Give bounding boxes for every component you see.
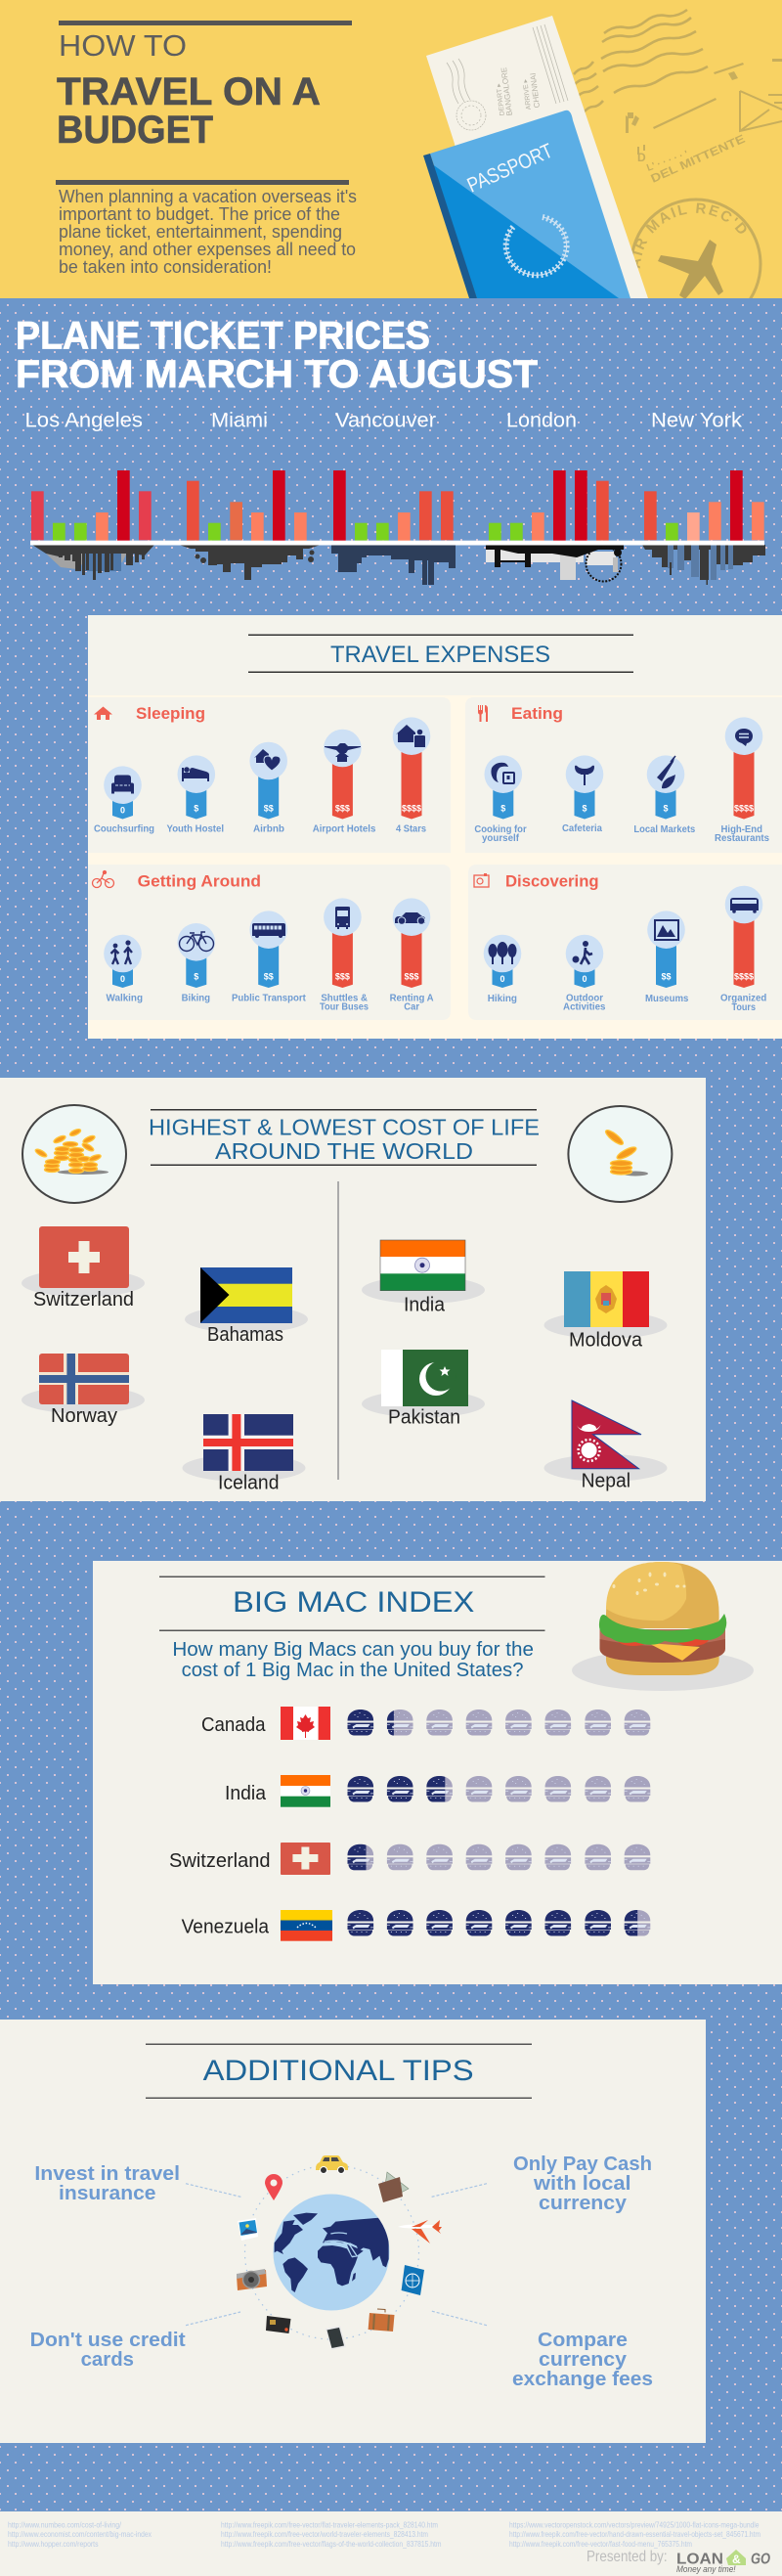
sources column 1: http://www.hopper.com/reports — [8, 2539, 98, 2549]
tip: compare exchange fees — [512, 2330, 653, 2390]
heading: travel expenses: TRAVEL EXPENSES — [330, 642, 550, 668]
air mail stamp — [631, 198, 762, 298]
item: cooking for yourself — [474, 755, 527, 844]
row: canada — [201, 1707, 650, 1740]
item: cafeteria: Cafeteria — [562, 823, 602, 834]
icon: camera — [474, 873, 489, 887]
item: cooking for yourself: Cooking for — [474, 824, 527, 835]
item: cooking for yourself: yourself — [482, 833, 520, 844]
item: renting a car: $$$ — [404, 972, 419, 982]
card: eating — [465, 697, 782, 853]
item: local markets — [633, 755, 696, 835]
intro paragraph: When planning a vacation overseas it's — [59, 187, 357, 206]
item: biking: Biking — [182, 993, 210, 1003]
item: organized tours: Organized — [720, 993, 766, 1003]
item: walking: Walking — [106, 993, 143, 1003]
title: travel on a budget: TRAVEL ON A — [57, 70, 321, 113]
sources column 3 — [509, 2519, 760, 2549]
item: youth hostel: $ — [194, 804, 198, 814]
skyline: Los Angeles — [32, 545, 154, 580]
city labels: Miami — [211, 409, 268, 432]
heading: cost of life: AROUND THE WORLD — [215, 1138, 473, 1164]
bars: Los Angeles — [31, 470, 152, 541]
item: high-end restaurants: High-End — [721, 824, 762, 835]
item: outdoor activities: 0 — [582, 974, 587, 984]
row: switzerland: Switzerland — [169, 1850, 270, 1872]
section title: FROM MARCH TO AUGUST — [16, 353, 538, 396]
row: venezuela — [182, 1910, 650, 1941]
sources column 1: http://www.economist.com/content/big-mac-index — [8, 2529, 152, 2539]
icon: smartphone — [326, 2326, 346, 2350]
item: organized tours: Tours — [731, 1002, 756, 1013]
panel: highest and lowest cost of life — [0, 1078, 706, 1501]
bars: Miami — [187, 470, 307, 541]
del mittente stamp: L' · · · · · ' — [645, 149, 690, 174]
intro paragraph: important to budget. The price of the — [59, 204, 340, 224]
icon: cyclist — [92, 870, 113, 888]
item: public transport: Public Transport — [232, 993, 306, 1003]
item: 4 stars — [393, 717, 430, 835]
sources column 2: http://www.freepik.com/free-vector/flags-of-the-world-collection_837815.htm — [221, 2539, 442, 2549]
boarding ticket: BANGALORE — [500, 67, 514, 116]
flag: nepal — [543, 1400, 667, 1492]
tip: only pay cash: currency — [539, 2193, 628, 2214]
sources column 2: http://www.freepik.com/free-vector/flat-traveler-elements-pack_828140.htm — [221, 2519, 438, 2529]
item: cooking for yourself: $ — [500, 804, 505, 814]
flag: switzerland — [22, 1226, 145, 1310]
item: couchsurfing — [94, 766, 154, 835]
item: walking: 0 — [120, 974, 125, 984]
postmark wavy lines — [574, 10, 708, 112]
flag: nepal: Nepal — [582, 1471, 630, 1492]
heading: additional tips: ADDITIONAL TIPS — [203, 2055, 474, 2087]
section: plane ticket prices — [16, 315, 765, 585]
icon: passport — [402, 2265, 424, 2295]
item: renting a car — [390, 898, 434, 1012]
del mittente stamp: DEL MITTENTE — [649, 132, 747, 186]
intro paragraph: be taken into consideration! — [59, 257, 272, 277]
flag: india — [362, 1240, 485, 1316]
intro paragraph — [59, 187, 357, 277]
boarding ticket: ARRIVE ▸ — [522, 78, 533, 111]
item: biking: $ — [194, 972, 198, 982]
flag: iceland — [182, 1414, 305, 1494]
item: public transport: $$ — [264, 972, 274, 982]
flag: moldova: Moldova — [569, 1330, 643, 1352]
icon: camera — [237, 2269, 267, 2290]
card: discovering — [468, 865, 782, 1020]
illustration: burger — [572, 1562, 754, 1691]
sources column 1 — [8, 2519, 152, 2549]
item: biking — [178, 923, 215, 1003]
title rule top — [59, 21, 352, 25]
tip: do not use credit cards — [30, 2330, 186, 2371]
flag: iceland: Iceland — [218, 1473, 280, 1494]
item: local markets: Local Markets — [633, 824, 696, 835]
row: switzerland — [169, 1843, 650, 1875]
flag: norway: Norway — [51, 1405, 117, 1427]
bars: London — [489, 470, 609, 541]
icon: wallet with cash — [378, 2172, 409, 2202]
row: india: India — [225, 1783, 267, 1804]
logo: loan and go: Money any time! — [676, 2564, 736, 2574]
intro paragraph: plane ticket, entertainment, spending — [59, 222, 342, 242]
item: high-end restaurants: $$$$ — [734, 804, 754, 814]
item: outdoor activities: Activities — [563, 1001, 606, 1012]
logo: loan and go: LOAN — [676, 2552, 723, 2568]
tip: do not use credit cards: Don't use credit — [30, 2330, 186, 2351]
item: organized tours — [720, 886, 766, 1013]
item: public transport — [232, 910, 306, 1003]
item: museums: $$ — [661, 972, 672, 982]
connector lines — [186, 2165, 487, 2339]
tip: only pay cash: Only Pay Cash — [513, 2154, 652, 2175]
item: walking — [104, 935, 143, 1003]
item: renting a car: Car — [404, 1001, 419, 1012]
item: museums — [645, 910, 689, 1004]
item: couchsurfing: 0 — [120, 806, 125, 816]
heading: cost of life — [149, 1109, 540, 1166]
city labels: New York — [651, 409, 743, 432]
heading: eating: Eating — [511, 704, 563, 723]
city labels — [25, 409, 743, 432]
item: airport hotels — [313, 730, 376, 835]
icon: credit card — [266, 2316, 291, 2333]
flag: norway — [22, 1354, 145, 1427]
tip: compare exchange fees: Compare — [538, 2330, 628, 2351]
tip: only pay cash — [513, 2154, 652, 2214]
sources column 3: http://www.freepik.com/free-vector/fast-food-menu_765375.htm — [509, 2539, 692, 2549]
item: shuttles and tour buses: Tour Buses — [320, 1001, 369, 1012]
air mail stamp: AIR MAIL REC'D — [633, 203, 747, 268]
heading: big mac index: BIG MAC INDEX — [233, 1586, 474, 1619]
item: hiking — [484, 935, 521, 1004]
card: sleeping — [88, 697, 451, 853]
flag: pakistan: Pakistan — [388, 1406, 460, 1428]
title rule bottom — [56, 180, 349, 185]
logo: loan and go — [676, 2550, 770, 2574]
icon: few coins — [568, 1106, 672, 1202]
item: cafeteria — [562, 755, 603, 834]
item: hiking: 0 — [500, 974, 505, 984]
icon: house — [94, 706, 112, 720]
skyline: Miami — [179, 545, 321, 580]
card: getting around — [88, 865, 451, 1020]
heading: sleeping: Sleeping — [136, 704, 205, 723]
stamp envelope — [740, 91, 782, 131]
wreath — [506, 217, 567, 275]
skyline: New York — [642, 545, 765, 585]
presented by: Presented by: — [586, 2549, 668, 2565]
flag: pakistan — [362, 1350, 485, 1428]
row: venezuela: Venezuela — [182, 1917, 270, 1938]
sources column 2 — [221, 2519, 442, 2549]
header panel — [0, 0, 782, 298]
divider — [337, 1181, 339, 1480]
item: 4 stars: $$$$ — [402, 804, 421, 814]
del mittente stamp — [626, 59, 782, 186]
icon: car — [316, 2155, 348, 2173]
bars: New York — [644, 470, 764, 541]
passport: PASSPORT — [464, 140, 556, 198]
heading: cost of life: HIGHEST & LOWEST COST OF LIFE — [149, 1115, 540, 1140]
globe — [274, 2195, 389, 2310]
item: airbnb: Airbnb — [253, 823, 284, 835]
passport — [423, 111, 630, 298]
intro paragraph: money, and other expenses all need to — [59, 240, 356, 259]
heading: discovering: Discovering — [505, 872, 599, 890]
skyline: Vancouver — [331, 545, 456, 585]
tip: invest in travel insurance: insurance — [59, 2183, 156, 2204]
subtitle: How many Big Macs can you buy for the — [172, 1639, 534, 1661]
flag: moldova — [543, 1271, 667, 1352]
row: india — [225, 1775, 650, 1807]
boarding ticket: CHENNAI — [529, 72, 542, 109]
item: couchsurfing: Couchsurfing — [94, 823, 154, 835]
flag: switzerland: Switzerland — [33, 1289, 134, 1310]
city labels: London — [506, 409, 577, 432]
title: travel on a budget: BUDGET — [57, 109, 213, 152]
sources column 1: http://www.numbeo.com/cost-of-living/ — [8, 2519, 122, 2529]
bars: Vancouver — [333, 470, 454, 541]
item: airport hotels: $$$ — [335, 804, 350, 814]
icon: airplane — [398, 2220, 442, 2243]
item: airbnb — [249, 742, 287, 835]
tip: do not use credit cards: cards — [81, 2349, 134, 2371]
section title: PLANE TICKET PRICES — [16, 315, 430, 358]
item: renting a car: Renting A — [390, 993, 434, 1003]
logo: loan and go: & — [732, 2553, 741, 2566]
panel: additional tips — [0, 2020, 706, 2443]
footer — [0, 2511, 782, 2576]
item: hiking: Hiking — [488, 994, 517, 1004]
tip: invest in travel insurance — [34, 2163, 180, 2204]
item: shuttles and tour buses: $$$ — [335, 972, 350, 982]
subtitle: cost of 1 Big Mac in the United States? — [182, 1660, 524, 1681]
city labels: Los Angeles — [25, 409, 143, 432]
title: travel on a budget — [57, 76, 321, 144]
icon: fork and knife — [478, 705, 488, 722]
flag: india: India — [404, 1295, 446, 1316]
subtitle — [172, 1639, 534, 1681]
del mittente stamp: D — [637, 151, 646, 164]
tip: compare exchange fees: currency — [539, 2349, 628, 2371]
item: youth hostel: Youth Hostel — [166, 823, 224, 835]
icon: photo — [238, 2218, 258, 2241]
item: shuttles and tour buses: Shuttles & — [321, 993, 368, 1003]
boarding ticket: DEPART ▸ — [496, 82, 506, 116]
icon: big coin pile — [22, 1105, 126, 1203]
panel: travel expenses — [88, 615, 782, 1039]
flag: bahamas: Bahamas — [207, 1324, 283, 1346]
tip: compare exchange fees: exchange fees — [512, 2369, 653, 2390]
icon: suitcase — [369, 2309, 395, 2332]
title: how to: HOW TO — [59, 28, 187, 63]
item: cafeteria: $ — [582, 804, 587, 814]
skyline: London — [486, 545, 624, 581]
item: shuttles and tour buses — [320, 898, 369, 1012]
item: airbnb: $$ — [264, 804, 274, 814]
item: youth hostel — [166, 755, 224, 835]
city labels: Vancouver — [335, 409, 436, 432]
boarding ticket — [426, 16, 648, 298]
logo: loan and go: GO — [751, 2552, 770, 2568]
flag: bahamas — [185, 1267, 308, 1346]
section title — [16, 315, 538, 396]
item: museums: Museums — [645, 994, 689, 1004]
item: organized tours: $$$$ — [734, 972, 754, 982]
item: high-end restaurants — [715, 717, 769, 844]
item: 4 stars: 4 Stars — [396, 823, 426, 835]
panel: big mac index — [93, 1561, 782, 1984]
item: airport hotels: Airport Hotels — [313, 823, 376, 835]
item: outdoor activities: Outdoor — [566, 993, 603, 1003]
tip: invest in travel insurance: Invest in travel — [34, 2163, 180, 2185]
item: outdoor activities — [563, 935, 606, 1012]
white baseline bar — [30, 541, 764, 546]
heading: getting around: Getting Around — [138, 872, 261, 890]
icon: location pin — [265, 2174, 282, 2200]
sources column 2: http://www.freepik.com/free-vector/world-traveler-elements_828413.htm — [221, 2529, 428, 2539]
item: local markets: $ — [663, 804, 669, 814]
tip: only pay cash: with local — [533, 2173, 631, 2195]
row: canada: Canada — [201, 1714, 266, 1736]
item: high-end restaurants: Restaurants — [715, 833, 769, 844]
